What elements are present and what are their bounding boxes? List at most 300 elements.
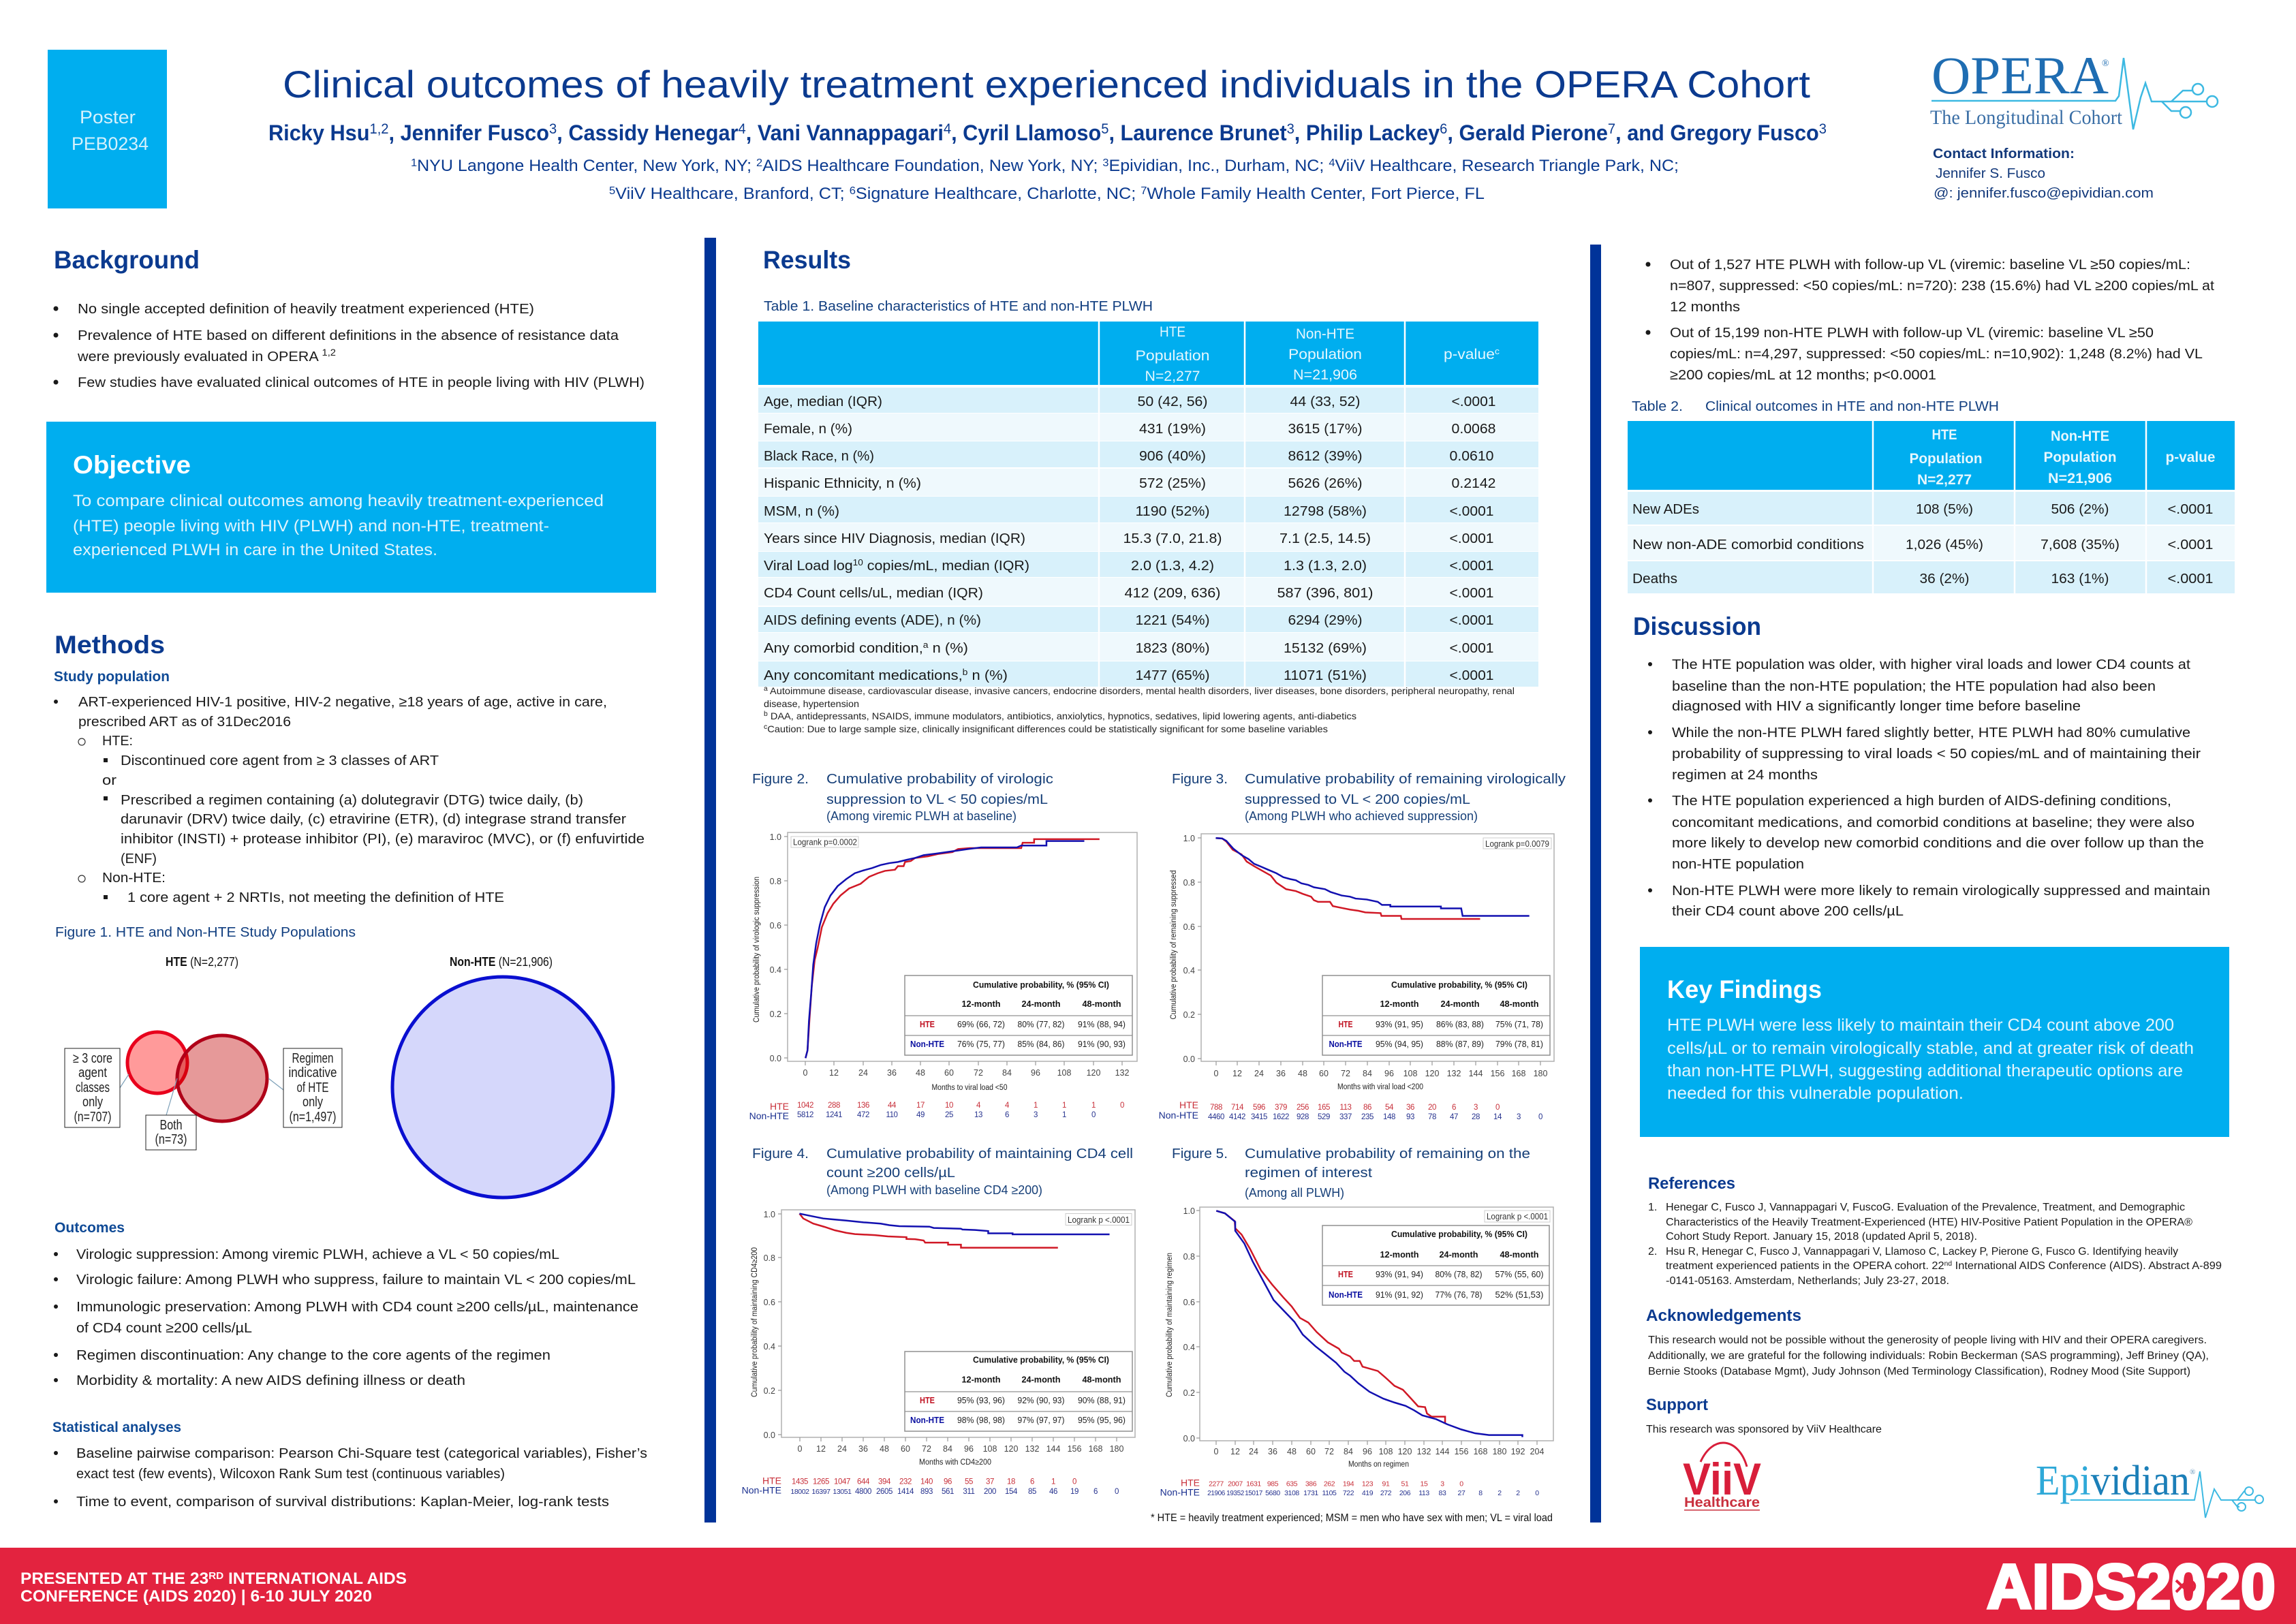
chart frame and axes: 0	[1214, 1447, 1219, 1456]
numbers at risk: 5680	[1265, 1489, 1280, 1497]
panel: references: 1.	[1648, 1202, 1657, 1213]
chart frame and axes: 0.2	[764, 1386, 775, 1396]
numbers at risk: 18002	[790, 1488, 809, 1496]
table 1 footnotes: DAA, antidepressants, NSAIDS, immune modulators, antibiotics, anxiolytics, hypnotics, sedatives, lipid lowering agents, anti-diabetics	[768, 710, 1356, 721]
figure 4 title	[752, 1146, 1133, 1197]
circle: non-HTE population	[392, 977, 613, 1198]
chart frame and axes: 84	[1363, 1069, 1372, 1078]
table 2: clinical outcomes	[1628, 399, 2235, 593]
panel: discussion: more likely to develop new comorbid conditions and die over follow up than the	[1672, 835, 2204, 851]
authors: 3	[1819, 121, 1827, 137]
panel: key findings	[1640, 947, 2229, 1137]
figure 3 title: Cumulative probability of remaining virologically	[1245, 772, 1566, 787]
numbers at risk: 113	[1418, 1489, 1429, 1497]
numbers at risk: HTE	[770, 1101, 789, 1112]
numbers at risk: 194	[1343, 1480, 1354, 1488]
table 1: baseline characteristics: 2.0 (1.3, 4.2)	[1131, 558, 1214, 574]
chart frame and axes: 60	[1319, 1069, 1329, 1078]
chart frame and axes: 0.0	[764, 1431, 775, 1440]
numbers at risk: 985	[1267, 1480, 1279, 1488]
numbers at risk: Non-HTE	[1159, 1110, 1198, 1121]
numbers at risk: 788	[1210, 1104, 1222, 1112]
numbers at risk: 10	[945, 1102, 953, 1110]
panel: discussion: probability of suppressing to viral loads < 50 copies/mL and of maintaining their	[1672, 746, 2201, 762]
numbers at risk: HTE	[1179, 1099, 1198, 1110]
authors: 6	[1440, 121, 1447, 137]
chart frame and axes: 192	[1511, 1447, 1525, 1456]
table 2: clinical outcomes: 36 (2%)	[1920, 571, 1969, 587]
chart frame and axes: 48	[880, 1444, 889, 1454]
panel: discussion: While the non-HTE PLWH fared slightly better, HTE PLWH had 80% cumulative	[1672, 725, 2190, 740]
authors: 3	[549, 121, 557, 137]
heading: background: Background	[54, 246, 200, 274]
label box: core agent classes only: (n=707)	[74, 1110, 112, 1125]
logo: OPERA: OPERA	[1932, 46, 2109, 105]
inset table: cumulative probability: 93% (91, 95)	[1376, 1020, 1423, 1029]
inset table: cumulative probability: 52% (51,53)	[1495, 1290, 1544, 1300]
numbers at risk: 16397	[811, 1488, 831, 1496]
numbers at risk: 561	[942, 1488, 954, 1496]
panel: background: were previously evaluated in OPERA	[78, 349, 306, 364]
figure 2	[749, 772, 1137, 1121]
figure 2 title: Figure 2.	[752, 772, 809, 787]
authors: , Jennifer Fusco	[389, 121, 549, 145]
survival curves	[805, 839, 1100, 1058]
inset table: cumulative probability: Non-HTE	[910, 1040, 944, 1049]
numbers at risk: 0	[1538, 1113, 1542, 1121]
chart frame and axes: 132	[1417, 1447, 1431, 1456]
affiliations: NYU Langone Health Center, New York, NY;	[417, 157, 756, 175]
numbers at risk: 13	[974, 1111, 982, 1119]
panel: virologic results bullets: ≥200 copies/mL at 12 months; p<0.0001	[1670, 367, 1936, 383]
numbers at risk: 644	[857, 1478, 870, 1486]
panel: methods: Prescribed a regimen containing (a) dolutegravir (DTG) twice daily, (b)	[121, 792, 583, 808]
chart frame and axes: 144	[1046, 1444, 1060, 1454]
chart frame and axes: 60	[944, 1068, 954, 1078]
table 1: baseline characteristics: copies/mL, median (IQR)	[863, 558, 1029, 574]
numbers at risk: 419	[1362, 1489, 1374, 1497]
numbers at risk: 288	[828, 1102, 840, 1110]
chart frame and axes: 96	[1384, 1069, 1394, 1078]
inset table: cumulative probability: 12-month	[962, 1375, 1000, 1384]
numbers at risk: 91	[1382, 1480, 1390, 1488]
inset table: cumulative probability: 76% (75, 77)	[957, 1040, 1005, 1049]
numbers at risk: 54	[1385, 1104, 1394, 1112]
conference text: CONFERENCE (AIDS 2020) | 6-10 JULY 2020	[20, 1587, 372, 1606]
chart frame and axes: 48	[1287, 1447, 1297, 1456]
logo: OPERA	[1930, 46, 2218, 129]
panel: background: Prevalence of HTE based on different definitions in the absence of resistance data	[78, 328, 619, 343]
inset table: cumulative probability: 80% (78, 82)	[1435, 1270, 1483, 1279]
table 2: clinical outcomes: N=2,277	[1917, 472, 1972, 488]
inset table: cumulative probability: 97% (97, 97)	[1018, 1416, 1064, 1425]
panel: discussion	[1633, 612, 2210, 919]
numbers at risk: 55	[965, 1478, 973, 1486]
authors: , Cassidy Henegar	[557, 121, 739, 145]
chart frame and axes	[1170, 834, 1554, 1091]
figure 5 title	[1172, 1146, 1530, 1200]
panel: discussion: The HTE population was older, with higher viral loads and lower CD4 counts at	[1672, 657, 2190, 672]
chart frame and axes: 0.0	[770, 1054, 781, 1063]
table 1: baseline characteristics: 1823 (80%)	[1135, 640, 1210, 656]
numbers at risk: 47	[1450, 1113, 1458, 1121]
panel: support	[1646, 1396, 1882, 1435]
affiliations: ViiV Healthcare, Research Triangle Park, NC;	[1335, 157, 1679, 175]
panel: references: International AIDS Conference (AIDS). Abstract A-899	[1952, 1260, 2222, 1272]
chart frame and axes: 0.4	[764, 1342, 775, 1352]
numbers at risk: 78	[1428, 1113, 1436, 1121]
panel: outcomes: Regimen discontinuation: Any change to the core agents of the regimen	[76, 1347, 550, 1363]
authors: , Cyril Llamoso	[951, 121, 1101, 145]
table 2: clinical outcomes: 108 (5%)	[1916, 501, 1973, 517]
chart frame and axes: 96	[1363, 1447, 1372, 1456]
inset table: cumulative probability: Cumulative probability, % (95% CI)	[1391, 980, 1527, 990]
inset table: cumulative probability	[905, 1352, 1132, 1431]
numbers at risk: 46	[1049, 1488, 1057, 1496]
panel: key findings: Key Findings	[1667, 975, 1822, 1003]
inset table: cumulative probability	[905, 975, 1132, 1055]
chart frame and axes: 0.6	[764, 1298, 775, 1307]
numbers at risk: 2007	[1228, 1480, 1243, 1488]
chart frame and axes: 144	[1469, 1069, 1483, 1078]
panel: references: 2.	[1648, 1246, 1657, 1258]
chart frame and axes: 0	[803, 1068, 808, 1078]
heading: results: Results	[763, 246, 851, 274]
survival curves	[1215, 838, 1530, 919]
panel: virologic results bullets: n=807, suppressed: <50 copies/mL: n=720): 238 (15.6%) had VL ≥200 copies/mL at	[1670, 278, 2214, 294]
inset table: cumulative probability: 95% (95, 96)	[1078, 1416, 1126, 1425]
table 1: baseline characteristics: CD4 Count cells/uL, median (IQR)	[764, 585, 983, 601]
table 2: clinical outcomes: <.0001	[2168, 501, 2213, 517]
numbers at risk: 337	[1339, 1113, 1352, 1121]
chart frame and axes: 12	[829, 1068, 839, 1078]
numbers at risk: 0	[1072, 1478, 1076, 1486]
panel: references: Characteristics of the Heavily Treatment-Experienced (HTE) HIV-Positive Patient Population in the OPERA®	[1666, 1217, 2192, 1228]
numbers at risk: 2277	[1209, 1480, 1224, 1488]
numbers at risk: 96	[944, 1478, 952, 1486]
numbers at risk: 635	[1286, 1480, 1298, 1488]
panel: methods: prescribed ART as of 31Dec2016	[78, 714, 291, 730]
affiliations: Signature Healthcare, Charlotte, NC;	[856, 185, 1141, 203]
figure 5 title: (Among all PLWH)	[1245, 1186, 1344, 1200]
numbers at risk: 8	[1478, 1489, 1483, 1497]
chart frame and axes: 180	[1534, 1069, 1547, 1078]
figure 1: study populations: Non-HTE (N=21,906)	[450, 955, 553, 969]
chart frame and axes: 1.0	[1183, 1206, 1195, 1216]
inset table: cumulative probability: 24-month	[1440, 999, 1480, 1009]
panel: background	[53, 246, 645, 390]
conference text: PRESENTED AT THE 23	[20, 1570, 205, 1588]
panel: support: Support	[1646, 1396, 1708, 1414]
panel: outcomes: Immunologic preservation: Among PLWH with CD4 count ≥200 cells/µL, maintenance	[76, 1299, 638, 1315]
chart frame and axes: 132	[1025, 1444, 1039, 1454]
table 1: baseline characteristics: 0.0068	[1451, 421, 1496, 437]
numbers at risk: 893	[920, 1488, 933, 1496]
table 1: baseline characteristics: 1221 (54%)	[1135, 612, 1210, 628]
chart frame and axes: 96	[964, 1444, 974, 1454]
inset table: cumulative probability: Cumulative probability, % (95% CI)	[1391, 1230, 1527, 1239]
table 1: baseline characteristics: Population	[1135, 348, 1210, 364]
table 1: baseline characteristics: p-value	[1444, 347, 1491, 362]
chart frame and axes: 0.2	[770, 1010, 781, 1019]
inset table: cumulative probability: Cumulative probability, % (95% CI)	[973, 1356, 1109, 1365]
inset table: cumulative probability: 12-month	[1380, 999, 1418, 1009]
panel: acknowledgements: Bernie Stooks (Database Mgmt), Judy Johnson (Med Terminology Classification), Rodney Mood (Site Support)	[1648, 1366, 2190, 1377]
table 1: baseline characteristics: 0.2142	[1451, 475, 1496, 491]
affiliations: 1	[411, 157, 417, 169]
panel: acknowledgements: This research would not be possible without the generosity of people living with HIV and their OPERA caregivers.	[1648, 1334, 2207, 1346]
numbers at risk: 93	[1406, 1113, 1414, 1121]
chart frame and axes: 156	[1491, 1069, 1504, 1078]
logrank label: Logrank p=0.0002	[793, 838, 857, 847]
inset table: cumulative probability: 24-month	[1022, 999, 1060, 1009]
numbers at risk: 1	[1062, 1102, 1066, 1110]
subheading: study population: Study population	[54, 669, 170, 685]
numbers at risk: 3108	[1284, 1489, 1299, 1497]
panel: references: References	[1648, 1174, 1735, 1193]
numbers at risk: Non-HTE	[1160, 1486, 1200, 1497]
table 1: baseline characteristics: HTE	[1160, 324, 1185, 340]
table 1 footnotes: disease, hypertension	[764, 698, 859, 709]
numbers at risk: 113	[1339, 1104, 1352, 1112]
panel: outcomes	[54, 1220, 638, 1388]
numbers at risk: 4	[1005, 1102, 1010, 1110]
chart frame and axes: 12	[1230, 1447, 1240, 1456]
chart frame and axes	[1166, 1206, 1553, 1469]
authors: , Vani Vannappagari	[746, 121, 944, 145]
numbers at risk: 18	[1007, 1478, 1015, 1486]
table 1: baseline characteristics: 11071 (51%)	[1284, 668, 1367, 683]
inset table: cumulative probability: 79% (78, 81)	[1495, 1040, 1543, 1049]
inset table: cumulative probability: 91% (88, 94)	[1078, 1020, 1126, 1029]
inset table: cumulative probability: 88% (87, 89)	[1436, 1040, 1484, 1049]
numbers at risk: 0	[1535, 1489, 1539, 1497]
numbers at risk: 232	[899, 1478, 912, 1486]
inset table: cumulative probability: 95% (93, 96)	[957, 1396, 1005, 1405]
numbers at risk: 596	[1253, 1104, 1265, 1112]
title: Clinical outcomes of heavily treatment experienced individuals in the OPERA Cohort	[283, 63, 1810, 106]
table 1 footnotes: a	[764, 685, 768, 693]
numbers at risk: 1	[1091, 1102, 1096, 1110]
table 1: baseline characteristics: 50 (42, 56)	[1138, 394, 1207, 409]
chart frame and axes: 60	[1306, 1447, 1316, 1456]
table 1: baseline characteristics: n (%)	[929, 640, 968, 656]
inset table: cumulative probability: 48-month	[1082, 1375, 1121, 1384]
inset table: cumulative probability: 85% (84, 86)	[1018, 1040, 1064, 1049]
numbers at risk: 21906	[1207, 1490, 1226, 1497]
affiliations	[411, 157, 1679, 203]
numbers at risk: 200	[984, 1488, 996, 1496]
numbers at risk: 1047	[834, 1478, 850, 1486]
table 1: baseline characteristics: 572 (25%)	[1139, 475, 1206, 491]
panel: virologic results bullets: Out of 15,199 non-HTE PLWH with follow-up VL (viremic: baseline VL ≥50	[1670, 325, 2154, 341]
table 1: baseline characteristics: <.0001	[1450, 531, 1493, 546]
numbers at risk: 13051	[833, 1488, 852, 1496]
chart frame and axes: 72	[974, 1068, 983, 1078]
label box: regimen indicative: (n=1,497)	[289, 1110, 337, 1125]
table 1: baseline characteristics: Years since HIV Diagnosis, median (IQR)	[764, 531, 1025, 546]
panel: acknowledgements: Additionally, we are grateful for the following individuals: Robin Beckerman (SAS programming), Jeff Briney (QA),	[1648, 1350, 2209, 1362]
numbers at risk: 4460	[1208, 1113, 1224, 1121]
table 2: clinical outcomes: Population	[1909, 451, 1983, 467]
table 1: baseline characteristics: c	[1495, 346, 1500, 356]
inset table: cumulative probability: 48-month	[1500, 999, 1538, 1009]
panel: statistical analyses: Statistical analyses	[52, 1420, 181, 1435]
table 1: baseline characteristics: <.0001	[1450, 558, 1493, 574]
numbers at risk: 1622	[1273, 1113, 1289, 1121]
table 1: baseline characteristics: Hispanic Ethnicity, n (%)	[764, 475, 921, 491]
numbers at risk: 1631	[1246, 1480, 1261, 1488]
panel: references: treatment experienced patients in the OPERA cohort. 22	[1666, 1260, 1937, 1272]
chart frame and axes: 24	[1249, 1447, 1258, 1456]
table 2: clinical outcomes: Non-HTE	[2051, 428, 2109, 444]
figure 2 title	[752, 772, 1053, 823]
numbers at risk	[1159, 1099, 1542, 1121]
panel: methods: Discontinued core agent from ≥ 3 classes of ART	[121, 753, 439, 768]
numbers at risk: 2605	[876, 1488, 893, 1496]
panel: outcomes: Morbidity & mortality: A new AIDS defining illness or death	[76, 1373, 465, 1388]
inset table: cumulative probability: 24-month	[1439, 1250, 1478, 1260]
chart frame and axes: 0.2	[1183, 1388, 1195, 1398]
inset table: cumulative probability: 98% (98, 98)	[957, 1416, 1005, 1425]
numbers at risk: 235	[1361, 1113, 1374, 1121]
authors: 4	[944, 121, 951, 137]
figure 4 title: count ≥200 cells/µL	[826, 1166, 955, 1181]
table 2: clinical outcomes: <.0001	[2168, 571, 2213, 587]
table 1: baseline characteristics: 1.3 (1.3, 2.0)	[1284, 558, 1367, 574]
numbers at risk: 123	[1362, 1480, 1374, 1488]
numbers at risk: 379	[1275, 1104, 1287, 1112]
authors: 1,2	[370, 121, 389, 137]
table 1: baseline characteristics: 10	[853, 557, 863, 567]
label box: regimen indicative: indicative	[289, 1065, 337, 1080]
authors: , Gerald Pierone	[1447, 121, 1608, 145]
heading: methods: Methods	[55, 631, 165, 659]
chart frame and axes: 0.0	[1183, 1055, 1195, 1064]
numbers at risk: 1435	[792, 1478, 808, 1486]
numbers at risk: 51	[1401, 1480, 1409, 1488]
logo: AIDS 2020: AIDS2020	[1987, 1551, 2276, 1622]
numbers at risk: 3	[1440, 1480, 1444, 1488]
panel: outcomes: Outcomes	[55, 1220, 125, 1236]
panel: references: Cohort Study Report. January 15, 2018 (updated April 5, 2018).	[1666, 1231, 1977, 1243]
chart frame and axes: 48	[916, 1068, 925, 1078]
numbers at risk: 44	[888, 1102, 897, 1110]
conference text	[20, 1570, 407, 1606]
table 1: baseline characteristics: 412 (209, 636)	[1124, 585, 1221, 601]
panel: background: Few studies have evaluated clinical outcomes of HTE in people living with HIV (PLWH)	[78, 375, 645, 390]
inset table: cumulative probability: 95% (94, 95)	[1376, 1040, 1423, 1049]
label box: core agent classes only: only	[82, 1095, 103, 1110]
heading: discussion: Discussion	[1633, 612, 1761, 640]
table 2: clinical outcomes: 506 (2%)	[2051, 501, 2109, 517]
numbers at risk: 714	[1231, 1104, 1244, 1112]
conference text: RD	[208, 1570, 223, 1582]
chart frame and axes: 0.4	[1183, 966, 1195, 975]
numbers at risk: 3	[1474, 1104, 1478, 1112]
numbers at risk: 0	[1495, 1104, 1500, 1112]
chart frame and axes: 132	[1447, 1069, 1461, 1078]
label box: core agent classes only: agent	[78, 1065, 107, 1080]
inset table: cumulative probability: Non-HTE	[910, 1416, 944, 1425]
table 1: baseline characteristics: N=21,906	[1293, 367, 1357, 383]
panel: outcomes: of CD4 count ≥200 cells/µL	[76, 1320, 252, 1336]
table 1: baseline characteristics: <.0001	[1450, 668, 1493, 683]
figure 2 title: Cumulative probability of virologic	[826, 772, 1053, 787]
panel: discussion: Non-HTE PLWH were more likely to remain virologically suppressed and maintain	[1672, 883, 2210, 899]
logo: OPERA: The Longitudinal Cohort	[1930, 106, 2123, 129]
panel: discussion: regimen at 24 months	[1672, 767, 1818, 783]
label box: both: Both	[159, 1118, 183, 1133]
chart frame and axes: 60	[901, 1444, 910, 1454]
inset table: cumulative probability: 24-month	[1022, 1375, 1060, 1384]
table 1: baseline characteristics: <.0001	[1450, 612, 1493, 628]
table 1: baseline characteristics: 906 (40%)	[1139, 448, 1206, 464]
panel: statistical analyses: exact test (few events), Wilcoxon Rank Sum test (continuous variables)	[76, 1466, 505, 1482]
chart frame and axes: 0.6	[1183, 922, 1195, 932]
figure 1: study populations: HTE (N=2,277)	[166, 955, 238, 969]
chart frame and axes: 0.6	[770, 921, 781, 931]
numbers at risk: 6	[1452, 1104, 1456, 1112]
chart frame and axes: 108	[1403, 1069, 1417, 1078]
chart frame and axes: 0	[1214, 1069, 1219, 1078]
figure 4	[742, 1146, 1135, 1496]
panel: virologic results bullets: copies/mL: n=4,297, suppressed: <50 copies/mL: n=10,902): 1,248 (8.2%) had VL	[1670, 346, 2203, 362]
logo: Epividian: ®	[2190, 1468, 2195, 1476]
table 1: baseline characteristics: 5626 (26%)	[1288, 475, 1363, 491]
table 1: baseline characteristics: 44 (33, 52)	[1290, 394, 1360, 409]
table 1: baseline characteristics: 15132 (69%)	[1284, 640, 1367, 656]
chart frame and axes: Cumulative probability of remaining suppressed	[1170, 871, 1178, 1019]
figure 3 title: Figure 3.	[1172, 772, 1228, 787]
numbers at risk: 1	[1062, 1111, 1066, 1119]
panel: methods: or	[102, 772, 117, 788]
inset table: cumulative probability: HTE	[920, 1396, 935, 1405]
panel: objective: experienced PLWH in care in the United States.	[73, 541, 437, 559]
numbers at risk: 86	[1363, 1104, 1371, 1112]
numbers at risk: 0	[1120, 1102, 1124, 1110]
chart frame and axes: 84	[943, 1444, 952, 1454]
panel: outcomes: Virologic failure: Among PLWH who suppress, failure to maintain VL < 200 copies/mL	[76, 1272, 636, 1287]
survival curves	[799, 1214, 1110, 1248]
numbers at risk: 148	[1383, 1113, 1395, 1121]
chart frame and axes: 108	[983, 1444, 997, 1454]
numbers at risk: 36	[1406, 1104, 1414, 1112]
contact information	[1933, 146, 2154, 201]
numbers at risk: 1105	[1322, 1489, 1337, 1497]
panel: references: -0141-05163. Amsterdam, Netherlands; July 23-27, 2018.	[1666, 1275, 1949, 1287]
figure 3 title: (Among PLWH who achieved suppression)	[1245, 809, 1478, 823]
contact information: Jennifer S. Fusco	[1936, 166, 2045, 181]
table 1: baseline characteristics: Viral Load log	[764, 558, 849, 574]
table 1: baseline characteristics: MSM, n (%)	[764, 503, 839, 519]
chart frame and axes: 120	[1398, 1447, 1412, 1456]
label box: core agent classes only	[65, 1048, 120, 1127]
inset table: cumulative probability: 90% (88, 91)	[1078, 1396, 1126, 1405]
table 1 footnotes: Caution: Due to large sample size, clinically insignificant differences could be statistically significant for some baseline variables	[767, 723, 1328, 734]
chart frame and axes: 48	[1298, 1069, 1307, 1078]
chart frame and axes	[751, 1210, 1135, 1467]
table 1: baseline characteristics: 7.1 (2.5, 14.5)	[1279, 531, 1371, 546]
numbers at risk: 0	[1115, 1488, 1119, 1496]
table 2: clinical outcomes: HTE	[1932, 427, 1957, 443]
table 1: baseline characteristics: Female, n (%)	[764, 421, 852, 437]
panel: references: nd	[1944, 1260, 1952, 1268]
numbers at risk: 206	[1399, 1489, 1411, 1497]
numbers at risk: 1265	[813, 1478, 829, 1486]
panel: methods: inhibitor (INSTI) + protease inhibitor (PI), (e) maraviroc (MVC), or (f) enfuvirtide	[121, 831, 645, 847]
affiliations: ViiV Healthcare, Branford, CT;	[615, 185, 850, 203]
